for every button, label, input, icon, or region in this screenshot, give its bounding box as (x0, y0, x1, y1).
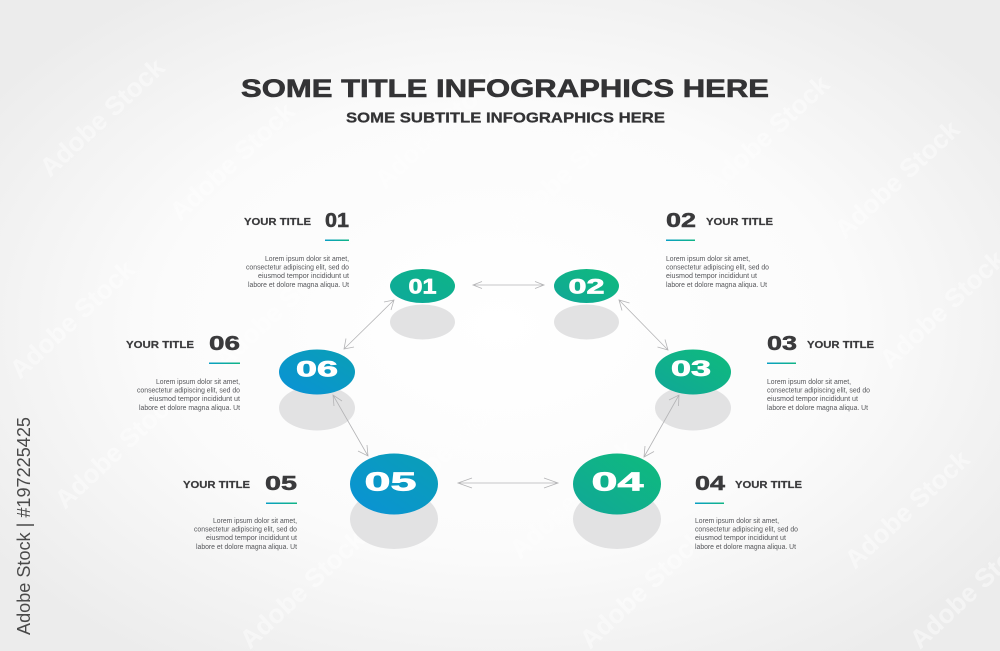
body text 05: eiusmod tempor incididunt ut (206, 533, 298, 542)
watermark pattern: Adobe Stock (839, 444, 976, 574)
node 01: 01 (408, 276, 437, 298)
node 02 (554, 269, 619, 303)
arrow 01-02 (473, 282, 544, 288)
node 02: 02 (568, 276, 604, 298)
body text 04: labore et dolore magna aliqua. Ut (695, 542, 797, 551)
body text 06 (137, 377, 241, 412)
body text 06: labore et dolore magna aliqua. Ut (139, 403, 241, 412)
heading 04 (695, 473, 802, 495)
arrow 04-05 (458, 478, 558, 488)
arrow 05-06 (333, 395, 368, 456)
heading 04: 04 (695, 473, 726, 495)
body text 06: Lorem ipsum dolor sit amet, (156, 377, 240, 386)
heading 03: 03 (767, 333, 797, 355)
arrow 02-03 (619, 300, 668, 350)
arrow 03-04 (644, 395, 679, 457)
body text 03: labore et dolore magna aliqua. Ut (767, 403, 869, 412)
watermark pattern: Adobe Stock (504, 434, 641, 564)
panel: item 05 text (183, 473, 298, 551)
heading 01 (244, 210, 349, 232)
body text 05: Lorem ipsum dolor sit amet, (213, 516, 297, 525)
body text 01: consectetur adipiscing elit, sed do (246, 262, 349, 272)
node 03: 03 (671, 356, 711, 381)
body text 06: eiusmod tempor incididunt ut (149, 394, 241, 403)
heading 03 (767, 333, 874, 355)
heading 01: YOUR TITLE (244, 217, 311, 228)
body text 06: consectetur adipiscing elit, sed do (137, 386, 240, 394)
body text 03: eiusmod tempor incididunt ut (767, 394, 859, 403)
watermark pattern: Adobe Stock (699, 69, 836, 199)
body text 01: eiusmod tempor incididunt ut (258, 271, 350, 280)
node 01 (390, 269, 455, 303)
body text 04: consectetur adipiscing elit, sed do (695, 524, 798, 534)
heading 06: 06 (209, 333, 240, 355)
watermark pattern: Adobe Stock (499, 106, 636, 236)
body text 05 (194, 516, 298, 551)
watermark pattern: Adobe Stock (49, 384, 186, 514)
body text 03 (767, 377, 870, 412)
watermark pattern: Adobe Stock (209, 244, 346, 374)
panel: item 02 text (666, 210, 773, 289)
node 06: 06 (296, 356, 338, 382)
heading 02 (666, 210, 773, 232)
heading 05: YOUR TITLE (183, 480, 250, 491)
heading 03: YOUR TITLE (807, 340, 874, 351)
title: SOME TITLE INFOGRAPHICS HERE (241, 75, 769, 103)
heading 06 (126, 333, 240, 355)
body text 02: eiusmod tempor incididunt ut (666, 271, 758, 280)
body text 01: Lorem ipsum dolor sit amet, (265, 254, 349, 263)
watermark pattern: Adobe Stock (234, 524, 371, 651)
stock credit: Adobe Stock | #197225425 (13, 417, 34, 635)
body text 02: consectetur adipiscing elit, sed do (666, 262, 769, 272)
subtitle: SOME SUBTITLE INFOGRAPHICS HERE (346, 110, 665, 126)
body text 05: consectetur adipiscing elit, sed do (194, 524, 297, 534)
body text 04 (695, 516, 798, 551)
node 05: 05 (364, 466, 416, 496)
panel: item 04 text (695, 473, 802, 551)
watermark pattern: Adobe Stock (829, 114, 966, 244)
arrow 06-01 (344, 300, 394, 349)
node 05 (350, 454, 438, 514)
body text 02: labore et dolore magna aliqua. Ut (666, 280, 768, 289)
node 04: 04 (592, 466, 644, 496)
body text 03: consectetur adipiscing elit, sed do (767, 386, 870, 394)
watermark pattern: Adobe Stock (574, 524, 711, 651)
heading 02: 02 (666, 210, 696, 232)
heading 01: 01 (325, 210, 349, 232)
watermark pattern: Adobe Stock (164, 96, 301, 226)
body text 05: labore et dolore magna aliqua. Ut (196, 542, 298, 551)
heading 05 (183, 473, 297, 495)
body text 02 (666, 254, 769, 289)
heading 06: YOUR TITLE (126, 340, 194, 351)
node 03 (655, 350, 731, 394)
heading 02: YOUR TITLE (706, 217, 773, 228)
body text 04: Lorem ipsum dolor sit amet, (695, 516, 779, 525)
heading 05: 05 (265, 473, 297, 495)
watermark pattern: Adobe Stock (539, 234, 676, 364)
body text 01 (246, 254, 350, 289)
panel: item 06 text (126, 333, 241, 412)
node 06 (279, 350, 355, 394)
watermark pattern: Adobe Stock (379, 384, 516, 514)
heading 04: YOUR TITLE (735, 480, 802, 491)
panel: item 01 text (244, 210, 350, 289)
body text 04: eiusmod tempor incididunt ut (695, 533, 787, 542)
watermark pattern: Adobe Stock (4, 254, 141, 384)
body text 02: Lorem ipsum dolor sit amet, (666, 254, 750, 263)
body text 03: Lorem ipsum dolor sit amet, (767, 377, 851, 386)
watermark pattern: Adobe Stock (369, 64, 506, 194)
node shadows (279, 304, 731, 549)
node 04 (573, 454, 661, 514)
watermark pattern: Adobe Stock (34, 52, 171, 182)
body text 01: labore et dolore magna aliqua. Ut (248, 280, 350, 289)
panel: item 03 text (767, 333, 874, 412)
